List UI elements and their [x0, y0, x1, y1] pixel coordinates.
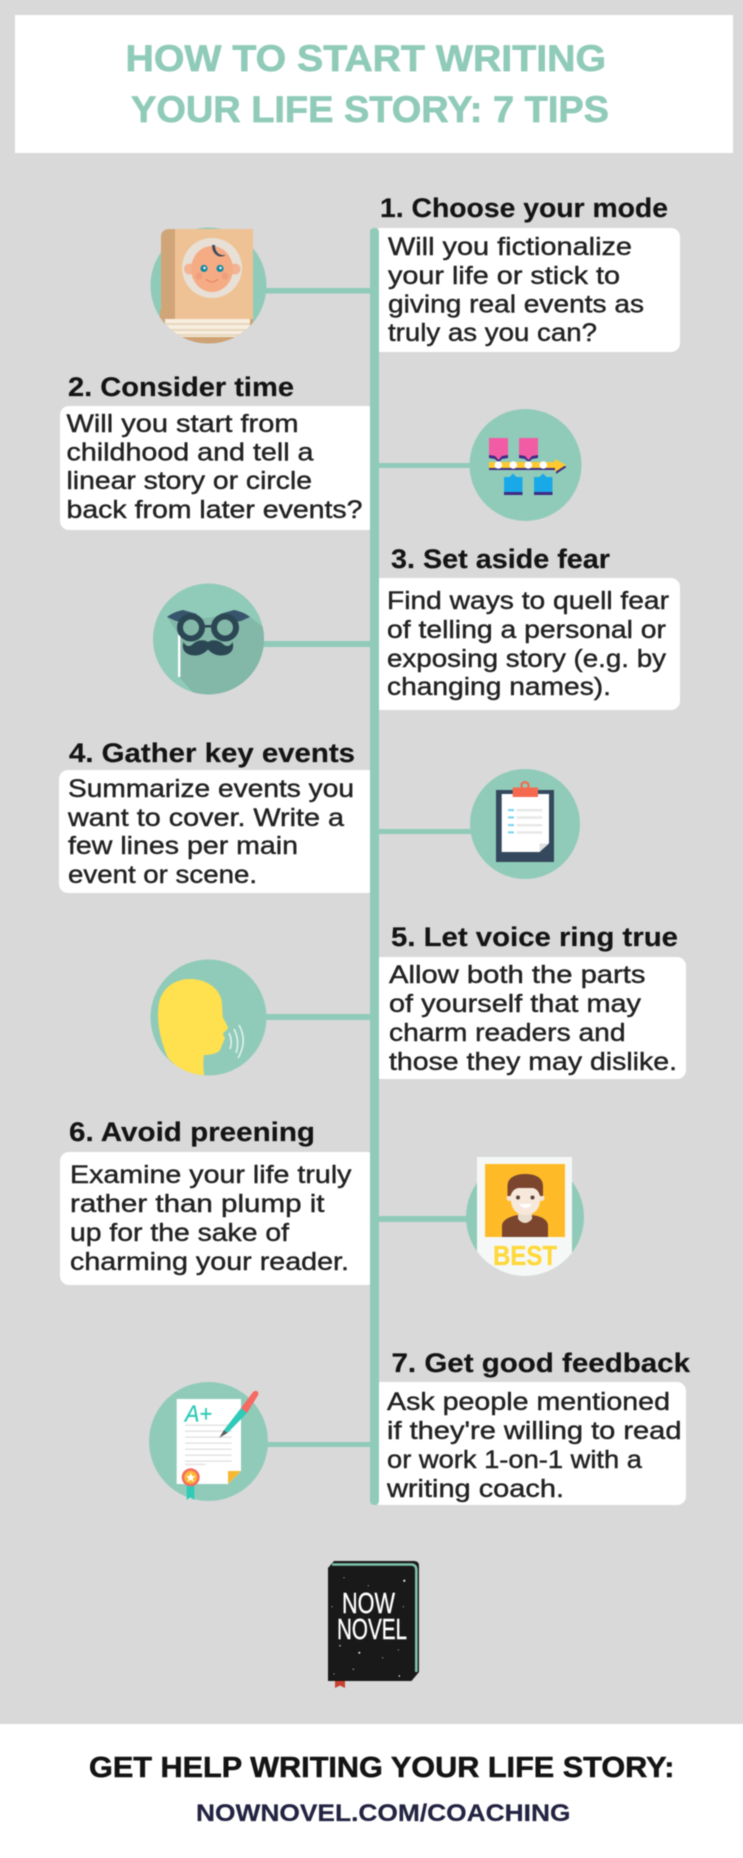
- connector 6: [376, 1216, 468, 1222]
- logo text: NOW: NOW: [342, 1588, 395, 1620]
- connector 5: [262, 1014, 372, 1020]
- tip 2: consider time: [60, 372, 582, 530]
- icon: speaking head: [158, 979, 243, 1080]
- tip 6: avoid preening: [60, 1117, 584, 1285]
- icon circle 5: [150, 960, 266, 1076]
- card 2: childhood and tell a: [66, 438, 314, 466]
- card 3: Find ways to quell fear: [387, 587, 669, 615]
- heading 3: 3. Set aside fear: [391, 544, 611, 574]
- medal: [182, 1468, 200, 1500]
- card 4: want to cover. Write a: [67, 804, 344, 832]
- card 5: of yourself that may: [389, 990, 642, 1018]
- icon circle 6: [466, 1158, 584, 1276]
- icon circle 7: [149, 1382, 268, 1501]
- title line 2: YOUR LIFE STORY: 7 TIPS: [131, 88, 609, 130]
- icon: timeline: [489, 438, 566, 495]
- connector 7: [264, 1442, 372, 1447]
- card 2: [60, 406, 376, 530]
- card 2: linear story or circle: [66, 467, 312, 495]
- card 4: few lines per main: [68, 832, 298, 860]
- card 1: giving real events as: [388, 290, 644, 318]
- title panel: [15, 15, 733, 153]
- card 2: Will you start from: [66, 410, 298, 438]
- now novel book logo: [328, 1561, 419, 1688]
- heading 1: 1. Choose your mode: [380, 193, 668, 223]
- card 5: those they may dislike.: [389, 1048, 677, 1076]
- footer headline: GET HELP WRITING YOUR LIFE STORY:: [89, 1752, 674, 1784]
- card 7: or work 1-on-1 with a: [387, 1446, 642, 1474]
- pencil: [219, 1391, 258, 1438]
- card 7: [372, 1382, 686, 1505]
- icon circle 2: [470, 409, 582, 521]
- card 1: [372, 228, 680, 352]
- logo text: NOVEL: NOVEL: [337, 1614, 407, 1646]
- icon circle 4: [470, 769, 580, 879]
- heading 6: 6. Avoid preening: [69, 1117, 315, 1147]
- title line 1: HOW TO START WRITING: [126, 37, 606, 79]
- icon circle 3: [153, 584, 264, 694]
- connector 1: [262, 288, 372, 294]
- heading 4: 4. Gather key events: [69, 738, 355, 768]
- icon: clipboard: [496, 782, 554, 862]
- card 5: [372, 957, 686, 1079]
- heading 7: 7. Get good feedback: [392, 1348, 691, 1378]
- icon circle 1: [150, 228, 266, 344]
- card 5: charm readers and: [389, 1019, 626, 1047]
- connector 2: [376, 463, 472, 468]
- card 5: Allow both the parts: [389, 961, 646, 989]
- card 3: of telling a personal or: [387, 616, 666, 644]
- icon: graded paper: [177, 1391, 258, 1500]
- icon: best portrait: [477, 1157, 572, 1282]
- tip 7: get good feedback: [149, 1348, 691, 1505]
- heading 2: 2. Consider time: [68, 372, 294, 402]
- card 6: up for the sake of: [70, 1219, 289, 1247]
- card 3: changing names).: [387, 673, 611, 701]
- card 6: rather than plump it: [70, 1190, 325, 1218]
- card 1: Will you fictionalize: [388, 233, 632, 261]
- connector 3: [260, 641, 372, 647]
- card 3: [372, 578, 680, 710]
- card 4: [59, 770, 376, 893]
- card 7: Ask people mentioned: [387, 1388, 670, 1416]
- tip 3: set aside fear: [153, 544, 680, 710]
- card 2: back from later events?: [66, 496, 362, 524]
- tip 5: let voice ring true: [150, 922, 686, 1080]
- connector 4: [376, 829, 473, 834]
- card 7: writing coach.: [386, 1475, 564, 1503]
- card 1: your life or stick to: [388, 262, 620, 290]
- bookmark: [335, 1681, 345, 1688]
- grade: A+: A+: [183, 1400, 212, 1426]
- label: BEST: BEST: [493, 1240, 557, 1271]
- card 6: [60, 1152, 376, 1285]
- card 3: exposing story (e.g. by: [387, 645, 667, 673]
- tip 1: choose your mode: [150, 193, 680, 352]
- icon: baby book: [160, 229, 253, 344]
- heading 5: 5. Let voice ring true: [391, 922, 678, 952]
- icon: glasses and moustache: [166, 610, 264, 694]
- tip 4: gather key events: [59, 738, 580, 893]
- card 1: truly as you can?: [388, 319, 597, 347]
- card 7: if they're willing to read: [387, 1417, 682, 1445]
- card 4: event or scene.: [68, 861, 257, 889]
- card 6: charming your reader.: [70, 1248, 349, 1276]
- footer panel: [0, 1724, 743, 1858]
- footer url: NOWNOVEL.COM/COACHING: [196, 1800, 570, 1827]
- timeline spine: [370, 228, 379, 1505]
- card 4: Summarize events you: [68, 775, 354, 803]
- card 6: Examine your life truly: [70, 1161, 352, 1189]
